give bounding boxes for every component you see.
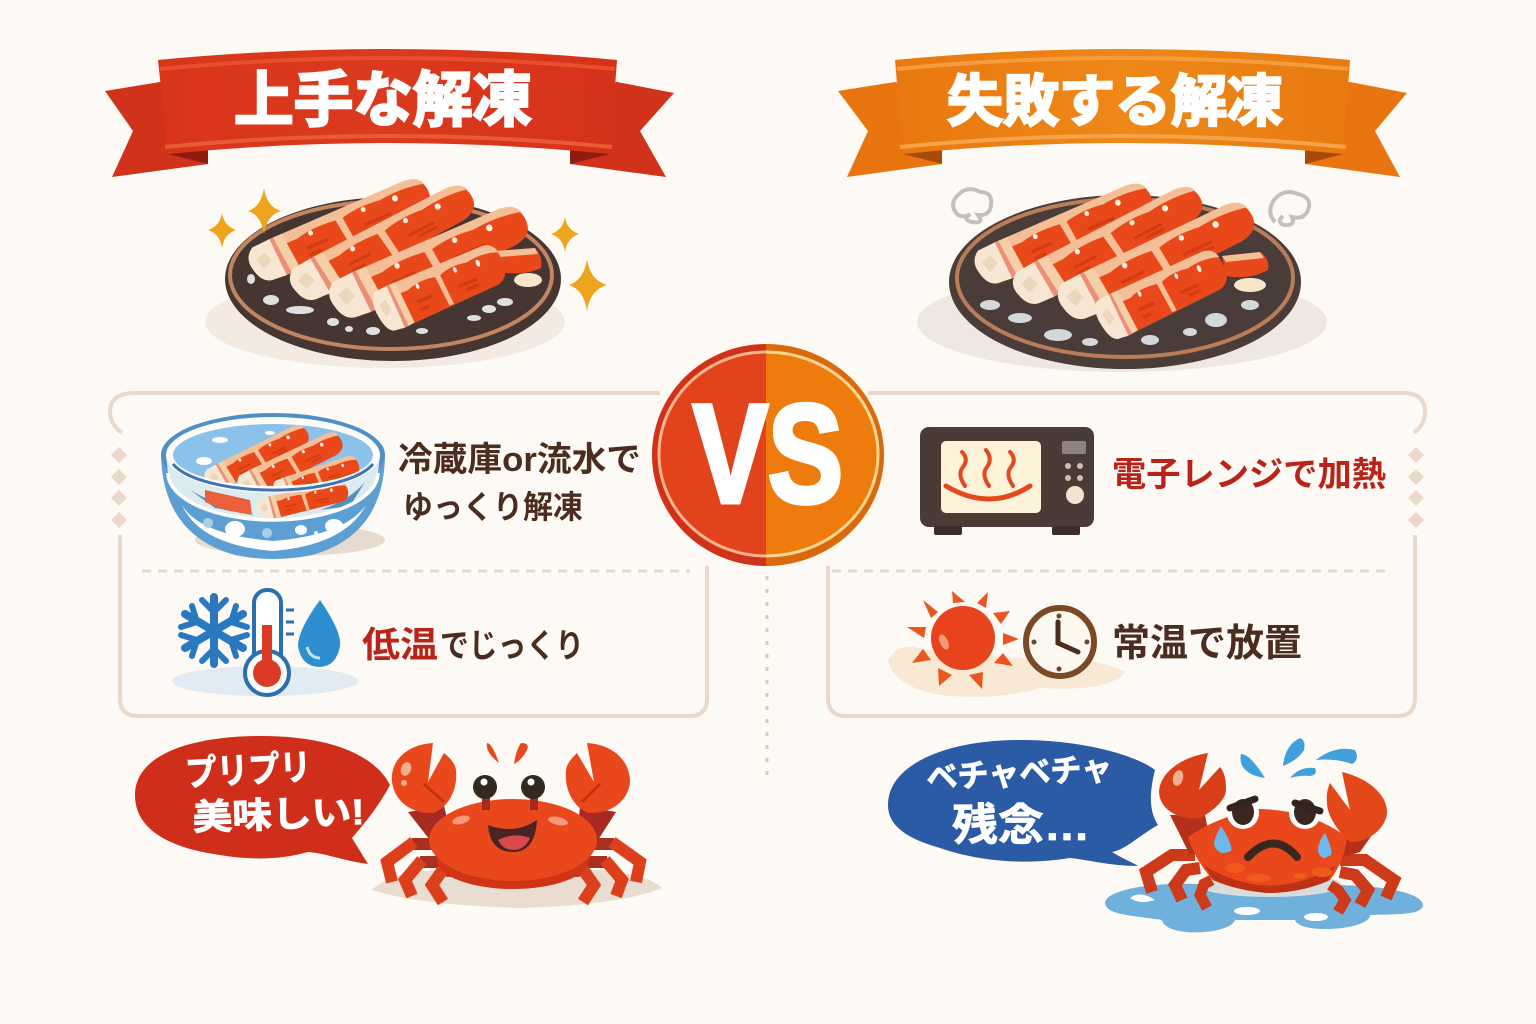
text: low temperature: 低温 [362, 624, 438, 665]
text: low temperature: でじっくり [440, 627, 584, 664]
right title: 失敗する解凍 [947, 70, 1283, 133]
icon: microwave [920, 427, 1094, 535]
text: refrigerator method [398, 441, 641, 525]
left title: 上手な解凍 [234, 67, 532, 134]
icon: steam puffs [953, 189, 1309, 225]
text: refrigerator method: 冷蔵庫or流水で [398, 441, 641, 479]
speech bubble: bad [888, 740, 1158, 866]
panel: right bad method outline [828, 393, 1425, 716]
text: microwave: 電子レンジで加熱 [1112, 456, 1386, 494]
left plate of crab legs [205, 174, 565, 368]
VS badge [652, 344, 884, 566]
speech bubble: good: プリプリ [184, 746, 312, 794]
VS text: VS [693, 375, 843, 532]
speech bubble: bad: 残念… [952, 801, 1090, 850]
speech bubble: bad: ベチャベチャ [926, 750, 1113, 796]
center dotted divider [766, 576, 768, 775]
right plate of crab legs [917, 178, 1327, 372]
icon: sparkles [208, 188, 607, 311]
speech bubble: good: 美味しい! [192, 791, 365, 838]
text: room temperature: 常温で放置 [1112, 623, 1302, 665]
text: refrigerator method: ゆっくり解凍 [403, 489, 583, 525]
text: low temperature [362, 624, 584, 665]
icon: happy crab [372, 743, 662, 908]
icon: snowflake thermometer and water drop [172, 590, 358, 696]
left ribbon banner [105, 49, 674, 177]
right ribbon banner [838, 49, 1407, 177]
panel: left good method outline [110, 393, 707, 716]
speech bubble: good [135, 736, 390, 864]
icon: sun and clock [888, 591, 1125, 697]
icon: glass bowl with crab legs in water [161, 413, 385, 559]
icon: sad crab in puddle [1105, 738, 1423, 932]
